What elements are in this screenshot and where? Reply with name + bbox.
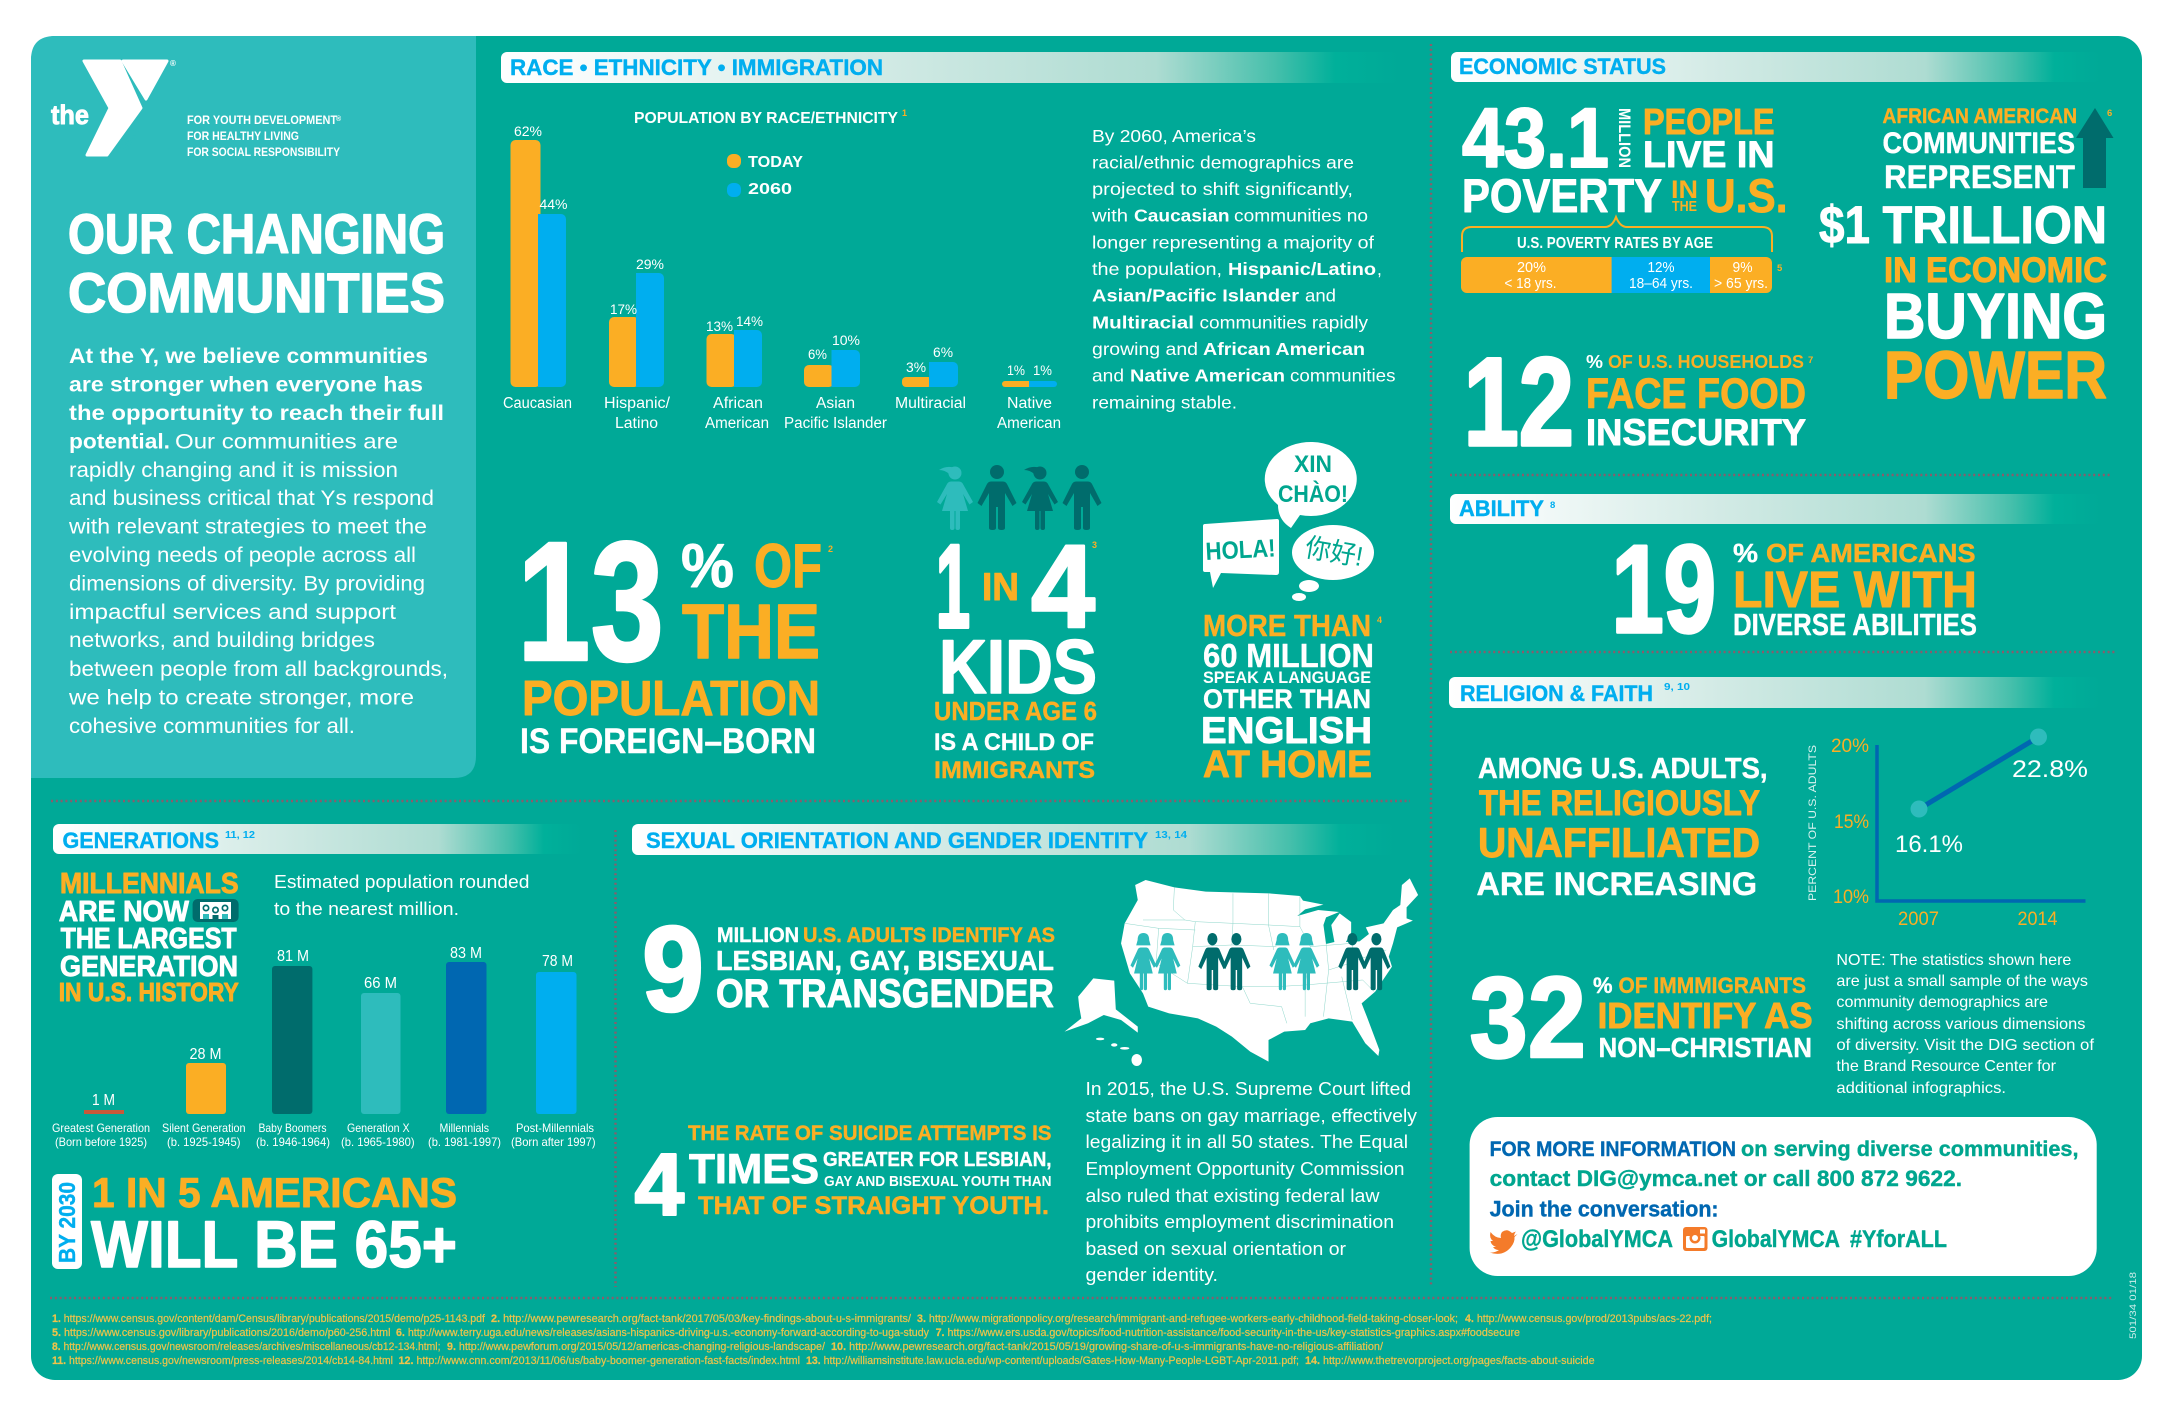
section header: economic status [1451, 52, 2100, 82]
text block: demographics shift: communities [1290, 366, 1396, 386]
text block: demographics shift: longer representing a majority of [1092, 232, 1374, 252]
value labels: 10% [832, 332, 860, 348]
stat: 43.1 million in poverty [1462, 91, 1788, 222]
value labels: 66 M [364, 975, 397, 992]
stat: 13 percent foreign-born: 13 [517, 507, 664, 697]
category labels: Silent Generation [162, 1121, 246, 1135]
logo tagline [187, 115, 342, 159]
category labels: Millennials [440, 1121, 489, 1135]
intro text: impactful services and support [69, 601, 396, 624]
panel: contact information [1470, 1117, 2097, 1276]
category labels: (b. 1965-1980) [341, 1135, 415, 1149]
value labels: 28 M [190, 1046, 222, 1063]
text block: supreme court: also ruled that existing federal law [1086, 1186, 1381, 1206]
category labels: Multiracial [895, 395, 966, 412]
panel: contact information: contact DIG@ymca.net or call 800 872 9622. [1490, 1166, 1962, 1191]
logo tagline: FOR HEALTHY LIVING [187, 131, 299, 143]
stat: 1 in 4 kids: UNDER AGE 6 [934, 696, 1097, 726]
bubble: hola [1203, 519, 1279, 588]
stat: 60 million languages [1201, 608, 1382, 786]
text block: demographics shift: projected to shift significantly, [1092, 179, 1353, 199]
line chart: religiously unaffiliated: PERCENT OF U.S. ADULTS [1807, 745, 1819, 901]
couple: women [1269, 933, 1319, 990]
bars [510, 140, 1057, 387]
stat: 43.1 million in poverty: LIVE IN [1643, 134, 1774, 175]
footnotes: 10. http://www.pewresearch.org/fact-tank/2015/05/19/growing-share-of-u-s-immigrants-have-no-religious-affiliation/ [831, 1341, 1384, 1353]
stat: 19 percent diverse abilities: DIVERSE ABILITIES [1733, 607, 1977, 642]
section header: sexual orientation and gender identity: SEXUAL ORIENTATION AND GENDER IDENTITY [646, 828, 1148, 853]
stat: 60 million languages: 4 [1377, 615, 1382, 625]
note: estimated population: Estimated population rounded [274, 872, 529, 892]
stat: religiously unaffiliated: ARE INCREASING [1476, 866, 1757, 902]
stat: 4 times suicide attempts: GREATER FOR LESBIAN, [823, 1149, 1052, 1171]
stacked bar: poverty rates by age: U.S. POVERTY RATES BY AGE [1517, 235, 1713, 252]
footnotes: 4. http://www.census.gov/prod/2013pubs/acs-22.pdf; [1465, 1313, 1712, 1325]
stat: by 2030 one in five: 1 IN 5 AMERICANS [92, 1169, 457, 1216]
stat: 32 percent non-christian: NON–CHRISTIAN [1598, 1032, 1812, 1063]
value labels: 44% [540, 196, 568, 212]
stacked bar: poverty rates by age [1461, 235, 1783, 293]
stat: 32 percent non-christian [1470, 954, 1813, 1082]
text block: note: NOTE: The statistics shown here [1836, 952, 2071, 969]
stat: religiously unaffiliated: AMONG U.S. ADULTS, [1478, 753, 1768, 785]
category labels [503, 395, 1061, 432]
section header: ability: 8 [1550, 500, 1555, 511]
footnotes: 2. http://www.pewresearch.org/fact-tank/2017/05/03/key-findings-about-u-s-immigrants/ [491, 1313, 912, 1325]
footnotes: 6. http://www.terry.uga.edu/news/releases/asians-hispanics-driving-u.s.-economy-forward-according-to-uga-study [396, 1327, 929, 1339]
heading: millennials largest generation: GENERATION [60, 951, 238, 983]
logo tagline: ® [336, 115, 342, 123]
value labels: 83 M [450, 945, 482, 962]
bubble: ni hao [1292, 525, 1374, 601]
stat: 9 million lgbt adults: 9 [642, 901, 704, 1037]
stat: 1 in 4 kids: IS A CHILD OF [934, 729, 1094, 756]
stat: 9 million lgbt adults: OR TRANSGENDER [716, 972, 1054, 1016]
chart title: POPULATION BY RACE/ETHNICITY [634, 110, 898, 127]
text block: demographics shift: remaining stable. [1092, 392, 1237, 412]
icon: up arrow [2076, 108, 2114, 188]
stat: 43.1 million in poverty: THE [1672, 198, 1697, 215]
stat: 19 percent diverse abilities: LIVE WITH [1733, 561, 1977, 618]
couple: men [1198, 933, 1250, 990]
text block: demographics shift: Hispanic/Latino [1228, 259, 1376, 279]
bar chart: population by race/ethnicity [503, 108, 1061, 432]
icon: instagram [1683, 1227, 1708, 1251]
stat: 60 million languages: OTHER THAN [1203, 684, 1371, 714]
title [68, 202, 445, 324]
stat: 9 million lgbt adults: MILLION [717, 924, 799, 947]
value labels: 1% [1007, 362, 1025, 378]
icon: twitter [1490, 1230, 1518, 1254]
stat: 4 times suicide attempts: THAT OF STRAIGHT YOUTH. [698, 1192, 1049, 1220]
value labels: 6% [933, 344, 953, 360]
intro text: the opportunity to reach their full [69, 402, 444, 425]
text block: supreme court [1086, 1079, 1417, 1285]
category labels: Pacific Islander [784, 415, 887, 432]
stat: 1 trillion buying power: TRILLION [1882, 196, 2107, 255]
stat: 32 percent non-christian: OF IMMMIGRANTS [1618, 973, 1806, 998]
stat: 1 trillion buying power: COMMUNITIES [1882, 127, 2075, 160]
text block: note: of diversity. Visit the DIG section of [1836, 1037, 2095, 1054]
category labels: Native [1007, 395, 1052, 412]
heading: millennials largest generation: THE LARGEST [61, 923, 237, 955]
text block: demographics shift: Caucasian [1134, 206, 1230, 226]
stat: 12 percent food insecurity: FACE FOOD [1586, 370, 1806, 418]
section header: economic status: ECONOMIC STATUS [1459, 54, 1666, 79]
stat: 43.1 million in poverty: IN [1671, 176, 1698, 204]
text block: note: community demographics are [1836, 994, 2048, 1011]
stacked bar: poverty rates by age: < 18 yrs. [1504, 275, 1556, 292]
footnotes: 13. http://williamsinstitute.law.ucla.edu/wp-content/uploads/Gates-How-Many-People-LGBT-Apr-2011.pdf; [806, 1355, 1299, 1367]
stacked bar: poverty rates by age: > 65 yrs. [1714, 275, 1768, 292]
stat: religiously unaffiliated: UNAFFILIATED [1478, 819, 1760, 866]
stat: 1 trillion buying power: $1 [1819, 196, 1870, 255]
section header: religion and faith: RELIGION & FAITH [1460, 681, 1653, 706]
line chart: religiously unaffiliated: 16.1% [1895, 831, 1963, 858]
title: OUR CHANGING [68, 202, 445, 265]
footnotes: 5. https://www.census.gov/library/publications/2016/demo/p60-256.html [52, 1327, 390, 1339]
footnotes: 1. https://www.census.gov/content/dam/Census/library/publications/2015/demo/p25-1143.pdf [52, 1313, 486, 1325]
couple: women [1130, 933, 1180, 990]
section header: race ethnicity immigration [501, 52, 1398, 83]
text block: note: are just a small sample of the ways [1836, 973, 2088, 990]
text block: demographics shift: communities rapidly [1200, 312, 1368, 332]
stat: by 2030 one in five: WILL BE 65+ [91, 1207, 457, 1281]
stat: 43.1 million in poverty: 43.1 [1462, 91, 1609, 185]
panel: introduction [31, 36, 476, 778]
stat: 12 percent food insecurity: 12 [1464, 333, 1574, 472]
line chart: religiously unaffiliated: 15% [1834, 812, 1869, 833]
text block: supreme court: Employment Opportunity Commission [1086, 1159, 1404, 1179]
heading: millennials largest generation: IN U.S. HISTORY [59, 977, 239, 1007]
legend [727, 154, 803, 198]
title: COMMUNITIES [68, 261, 445, 324]
category labels: Hispanic/ [604, 395, 671, 412]
bubble: xin chao [1265, 442, 1357, 528]
intro text: evolving needs of people across all [69, 544, 416, 567]
intro text: potential. [69, 430, 170, 454]
intro text: and business critical that Ys respond [69, 487, 434, 510]
heading: millennials largest generation: ARE NOW [59, 896, 190, 928]
stat: 4 times suicide attempts: THE RATE OF SUICIDE ATTEMPTS IS [688, 1122, 1052, 1145]
intro text: At the Y, we believe communities [69, 345, 428, 368]
text block: note: the Brand Resource Center for [1836, 1058, 2057, 1075]
stat: 12 percent food insecurity [1464, 333, 1813, 472]
heading: millennials largest generation: MILLENNIALS [60, 868, 239, 900]
value labels: 13% [706, 318, 733, 334]
logo: YMCA [51, 59, 176, 155]
section header: ability [1450, 494, 2100, 524]
stat: 1 trillion buying power: AFRICAN AMERICAN [1882, 105, 2077, 128]
text block: supreme court: based on sexual orientation or [1086, 1239, 1346, 1259]
stat: 12 percent food insecurity: OF U.S. HOUSEHOLDS [1608, 352, 1804, 372]
category labels: Generation X [347, 1121, 410, 1135]
section header: generations: GENERATIONS [62, 828, 219, 853]
stat: 60 million languages: ENGLISH [1201, 710, 1372, 751]
bubble: xin chao: XIN [1294, 451, 1332, 478]
value labels: 6% [808, 346, 827, 362]
line chart: religiously unaffiliated: 2014 [2018, 909, 2058, 930]
stat: 4 times suicide attempts: 4 [635, 1135, 684, 1234]
note: estimated population: to the nearest million. [274, 899, 459, 919]
category labels: (Born before 1925) [55, 1135, 147, 1149]
stat: by 2030 one in five [52, 1169, 457, 1281]
category labels: Post-Millennials [516, 1121, 594, 1135]
stat: 19 percent diverse abilities: OF AMERICANS [1766, 538, 1976, 568]
panel: contact information: on serving diverse communities, [1741, 1137, 2078, 1161]
note: estimated population [274, 872, 529, 919]
value labels: 1% [1033, 362, 1052, 378]
text block: demographics shift: and [1305, 286, 1336, 306]
text block: demographics shift: the population, [1092, 259, 1222, 279]
stat: 60 million languages: AT HOME [1203, 744, 1372, 786]
stat: 32 percent non-christian: IDENTIFY AS [1598, 995, 1813, 1036]
stat: 1 in 4 kids: 1 [936, 521, 970, 653]
section header: sexual orientation and gender identity: 13, 14 [1155, 829, 1187, 841]
text block: note: shifting across various dimensions [1836, 1016, 2085, 1033]
stat: 43.1 million in poverty: PEOPLE [1643, 101, 1774, 142]
stat: 1 trillion buying power: REPRESENT [1884, 159, 2075, 195]
stat: 1 trillion buying power: IN ECONOMIC [1884, 251, 2107, 290]
text block: demographics shift [1091, 126, 1396, 412]
text block: supreme court: legalizing it in all 50 states. The Equal [1086, 1132, 1408, 1152]
map: united states with couples [1065, 878, 1418, 1066]
category labels: American [705, 415, 769, 432]
intro text: are stronger when everyone has [69, 374, 423, 396]
panel: contact information: @GlobalYMCA [1521, 1226, 1673, 1253]
value labels: 1 M [92, 1092, 115, 1109]
text block: supreme court: prohibits employment discrimination [1086, 1212, 1394, 1232]
stat: 32 percent non-christian: 32 [1470, 954, 1586, 1082]
stat: 43.1 million in poverty: U.S. [1705, 169, 1788, 222]
intro text: rapidly changing and it is mission [69, 459, 398, 482]
stat: 32 percent non-christian: % [1593, 973, 1612, 998]
stat: 4 times suicide attempts [635, 1122, 1052, 1234]
stat: 9 million lgbt adults: U.S. ADULTS IDENTIFY AS [803, 924, 1055, 947]
footnotes: 9. http://www.pewforum.org/2015/05/12/americas-changing-religious-landscape/ [447, 1341, 826, 1353]
stat: 19 percent diverse abilities [1612, 521, 1977, 659]
stat: 13 percent foreign-born: THE [682, 589, 820, 675]
category labels: Caucasian [503, 395, 572, 412]
value labels: 78 M [542, 953, 573, 970]
logo tagline: FOR YOUTH DEVELOPMENT [187, 115, 337, 127]
legend: TODAY [748, 154, 803, 171]
print code: 501/34 01/18 [2128, 1272, 2139, 1339]
text block: demographics shift: , [1377, 259, 1382, 279]
icon: speech bubbles [1203, 442, 1374, 601]
stat: 1 in 4 kids: KIDS [939, 625, 1097, 710]
intro text: Our communities are [175, 430, 398, 454]
text block: note: additional infographics. [1836, 1080, 2006, 1097]
category labels: Latino [615, 415, 658, 432]
stat: 1 trillion buying power: BUYING [1884, 280, 2107, 352]
stat: 13 percent foreign-born: IS FOREIGN–BORN [520, 722, 816, 761]
line chart: religiously unaffiliated: 22.8% [2012, 756, 2088, 783]
text block: demographics shift: Native American [1130, 366, 1285, 386]
bar chart: generations [52, 945, 596, 1149]
text block: demographics shift: with [1091, 206, 1128, 226]
value labels: 17% [610, 301, 637, 317]
category labels: Asian [816, 395, 855, 412]
section header: generations: 11, 12 [225, 829, 255, 841]
intro text: with relevant strategies to meet the [68, 516, 427, 538]
text block: demographics shift: African American [1203, 339, 1365, 359]
category labels: (b. 1981-1997) [428, 1135, 501, 1149]
stat: 43.1 million in poverty: MILLION [1615, 108, 1634, 168]
stat: 60 million languages: MORE THAN [1203, 608, 1371, 643]
text block: demographics shift: communities no [1234, 206, 1368, 226]
stat: 4 times suicide attempts: GAY AND BISEXUAL YOUTH THAN [824, 1173, 1052, 1190]
intro text: networks, and building bridges [69, 629, 375, 652]
category labels: Baby Boomers [258, 1121, 326, 1135]
bubble: hola: HOLA! [1205, 534, 1276, 566]
stat: 60 million languages: SPEAK A LANGUAGE [1203, 668, 1371, 687]
logo: YMCA: YMCA [119, 127, 142, 154]
value labels: 62% [514, 123, 542, 139]
section header: generations [53, 824, 581, 854]
bracket [1462, 217, 1772, 252]
stat: by 2030 one in five: BY 2030 [54, 1182, 80, 1263]
stat: 19 percent diverse abilities: 19 [1612, 521, 1716, 659]
stat: 19 percent diverse abilities: % [1733, 538, 1758, 568]
stat: 12 percent food insecurity: 7 [1808, 355, 1813, 366]
value labels: 81 M [277, 948, 309, 965]
couple: men [1338, 933, 1390, 990]
logo: YMCA: the [51, 100, 89, 130]
stat: 13 percent foreign-born: % [681, 532, 734, 601]
text block: demographics shift: By 2060, America’s [1092, 126, 1256, 146]
text block: demographics shift: Asian/Pacific Islander [1092, 286, 1299, 306]
line chart: religiously unaffiliated: 10% [1833, 887, 1869, 908]
intro text: cohesive communities for all. [69, 715, 355, 738]
stat: religiously unaffiliated [1476, 753, 1768, 902]
value labels [92, 945, 573, 1109]
stat: 1 in 4 kids: 3 [1092, 540, 1097, 550]
stat: 12 percent food insecurity: % [1586, 352, 1603, 372]
panel: contact information: #YforALL [1850, 1226, 1947, 1253]
text block: note [1836, 952, 2095, 1097]
bubble: ni hao: 你好! [1303, 532, 1365, 572]
line chart: religiously unaffiliated [1807, 728, 2088, 930]
stacked bar: poverty rates by age: 5 [1777, 263, 1783, 274]
text block: demographics shift: racial/ethnic demographics are [1092, 152, 1354, 172]
stat: 43.1 million in poverty: POVERTY [1462, 169, 1662, 222]
stat: 60 million languages: 60 MILLION [1203, 637, 1374, 674]
stat: 13 percent foreign-born [517, 507, 833, 761]
section header: religion and faith: 9, 10 [1664, 681, 1690, 693]
panel: contact information: Join the conversation: [1490, 1197, 1719, 1222]
section header: race ethnicity immigration: RACE • ETHNICITY • IMMIGRATION [510, 55, 883, 80]
icon: four children [937, 465, 1102, 530]
category labels: (b. 1925-1945) [167, 1135, 240, 1149]
line chart: religiously unaffiliated: 2007 [1898, 909, 1939, 930]
footnotes: 12. http://www.cnn.com/2013/11/06/us/baby-boomer-generation-fast-facts/index.html [398, 1355, 800, 1367]
bubble: xin chao: CHÀO! [1278, 480, 1348, 508]
stacked bar: poverty rates by age: 20% [1517, 259, 1546, 276]
icon: phone selfie [193, 899, 239, 922]
legend: 2060 [748, 181, 792, 198]
text block: demographics shift: and [1092, 366, 1124, 386]
text block: supreme court: state bans on gay marriage, effectively [1086, 1106, 1417, 1126]
section header: religion and faith [1449, 677, 2100, 708]
logo tagline: FOR SOCIAL RESPONSIBILITY [187, 147, 340, 159]
line chart: religiously unaffiliated: 20% [1831, 736, 1869, 757]
footnotes: 11. https://www.census.gov/newsroom/press-releases/2014/cb14-84.html [52, 1355, 393, 1367]
stat: 1 trillion buying power: POWER [1884, 338, 2107, 413]
heading: millennials largest generation [59, 868, 239, 1007]
stat: 13 percent foreign-born: OF [754, 532, 822, 601]
bar chart: population by race/ethnicity: 1 [902, 108, 907, 118]
footnotes: 8. http://www.census.gov/newsroom/releases/archives/miscellaneous/cb12-134.html; [52, 1341, 440, 1353]
category labels [52, 1121, 596, 1149]
text block: supreme court: In 2015, the U.S. Supreme Court lifted [1086, 1079, 1411, 1099]
stat: 13 percent foreign-born: POPULATION [522, 672, 820, 726]
stat: 1 in 4 kids [934, 521, 1097, 784]
value labels: 3% [906, 359, 926, 375]
text block: supreme court: gender identity. [1086, 1265, 1218, 1285]
value labels: 14% [736, 313, 763, 329]
text block: demographics shift: Multiracial [1092, 312, 1194, 332]
stat: 9 million lgbt adults: LESBIAN, GAY, BISEXUAL [716, 945, 1054, 976]
category labels: American [997, 415, 1061, 432]
category labels: African [713, 395, 763, 412]
panel: contact information: GlobalYMCA [1712, 1226, 1840, 1253]
section header: ability: ABILITY [1459, 496, 1544, 521]
stat: 1 in 4 kids: IN [982, 566, 1019, 609]
panel: contact information: FOR MORE INFORMATION [1490, 1138, 1736, 1161]
section header: sexual orientation and gender identity [632, 824, 1394, 855]
category labels: (b. 1946-1964) [256, 1135, 330, 1149]
stat: 9 million lgbt adults [642, 901, 1055, 1037]
stat: 1 in 4 kids: IMMIGRANTS [934, 757, 1095, 784]
stat: 4 times suicide attempts: TIMES [689, 1145, 819, 1192]
intro text [68, 345, 448, 738]
stacked bar: poverty rates by age: 9% [1732, 259, 1752, 276]
value labels: 29% [636, 256, 664, 272]
stat: 12 percent food insecurity: INSECURITY [1586, 412, 1806, 453]
footnotes: 3. http://www.migrationpolicy.org/research/immigrant-and-refugee-workers-early-childhood-field-taking-closer-look; [917, 1313, 1458, 1325]
intro text: dimensions of diversity. By providing [69, 572, 425, 596]
text block: demographics shift: growing and [1092, 339, 1198, 359]
stat: religiously unaffiliated: THE RELIGIOUSLY [1479, 784, 1760, 823]
value labels [514, 123, 1052, 378]
footnotes [52, 1313, 1712, 1367]
stacked bar: poverty rates by age: 18–64 yrs. [1629, 275, 1693, 292]
stat: 13 percent foreign-born: 2 [828, 544, 833, 554]
intro text: between people from all backgrounds, [69, 658, 448, 681]
stat: 1 in 4 kids: 4 [1031, 521, 1095, 653]
category labels: (Born after 1997) [511, 1135, 596, 1149]
category labels: Greatest Generation [52, 1121, 150, 1135]
stacked bar: poverty rates by age: 12% [1648, 259, 1674, 276]
stat: 1 trillion buying power [1819, 105, 2114, 413]
intro text: we help to create stronger, more [68, 686, 414, 710]
logo: YMCA: ® [170, 59, 176, 68]
footnotes: 7. https://www.ers.usda.gov/topics/food-nutrition-assistance/food-security-in-the-us/key-statistics-graphics.aspx#foodsecure [936, 1327, 1520, 1339]
footnotes: 14. http://www.thetrevorproject.org/pages/facts-about-suicide [1305, 1355, 1595, 1367]
stat: 1 trillion buying power: 6 [2107, 108, 2112, 119]
